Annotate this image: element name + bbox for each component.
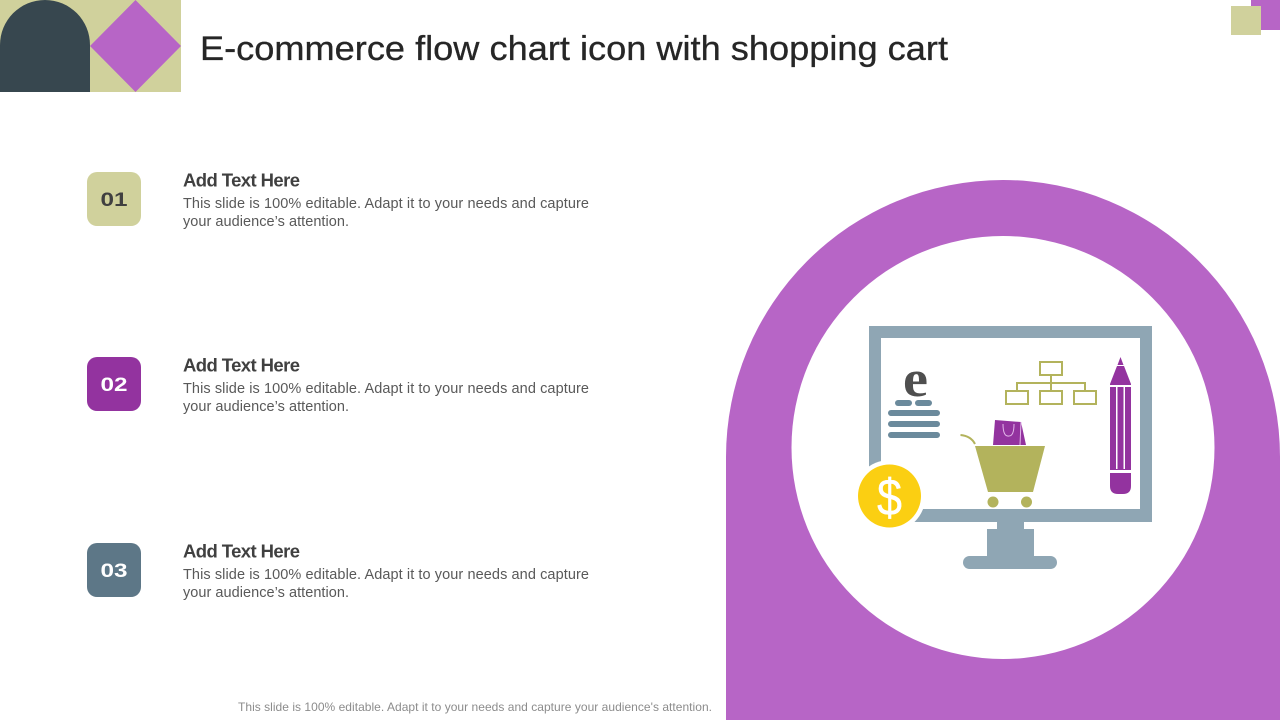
icon: shopping cart bbox=[960, 435, 1045, 508]
heading 03: Add Text Here bbox=[183, 540, 300, 562]
badge 03 bbox=[87, 543, 141, 597]
footer note: This slide is 100% editable. Adapt it to your needs and capture your audience's attention. bbox=[238, 700, 712, 714]
purple arch panel bbox=[726, 180, 1280, 720]
icon: flow chart bbox=[1006, 362, 1096, 404]
badge 02: 02 bbox=[100, 375, 128, 396]
body text 02: This slide is 100% editable. Adapt it to your needs and capture bbox=[183, 381, 589, 397]
body text 02: your audience’s attention. bbox=[183, 399, 349, 415]
icon: dollar coin: $ bbox=[877, 469, 902, 527]
icon: letter e with text lines: e bbox=[903, 351, 928, 408]
body text 01: your audience’s attention. bbox=[183, 214, 349, 230]
white circle bbox=[792, 236, 1214, 659]
heading 01: Add Text Here bbox=[183, 170, 300, 190]
item 03 bbox=[87, 540, 589, 601]
body text 03: your audience’s attention. bbox=[183, 585, 349, 601]
corner decoration bbox=[1231, 0, 1280, 35]
body text 01 bbox=[183, 196, 589, 230]
icon: pencil bbox=[1110, 357, 1131, 494]
icon: letter e with text lines bbox=[888, 351, 940, 438]
icon: dollar coin bbox=[854, 460, 926, 532]
badge 03: 03 bbox=[100, 561, 128, 582]
title: E-commerce flow chart icon with shopping cart bbox=[200, 30, 949, 68]
badge 01 bbox=[87, 172, 141, 226]
icon: shopping bag bbox=[993, 420, 1026, 445]
item 01 bbox=[87, 170, 589, 230]
body text 03 bbox=[183, 567, 589, 601]
icon: e-commerce monitor bbox=[854, 326, 1152, 569]
monitor bbox=[869, 326, 1152, 569]
badge 02 bbox=[87, 357, 141, 411]
body text 03: This slide is 100% editable. Adapt it to your needs and capture bbox=[183, 567, 589, 583]
item 02 bbox=[87, 354, 589, 415]
header decoration bbox=[0, 0, 181, 92]
body text 01: This slide is 100% editable. Adapt it to your needs and capture bbox=[183, 196, 589, 212]
badge 01: 01 bbox=[100, 190, 128, 211]
body text 02 bbox=[183, 381, 589, 415]
heading 02: Add Text Here bbox=[183, 354, 300, 376]
